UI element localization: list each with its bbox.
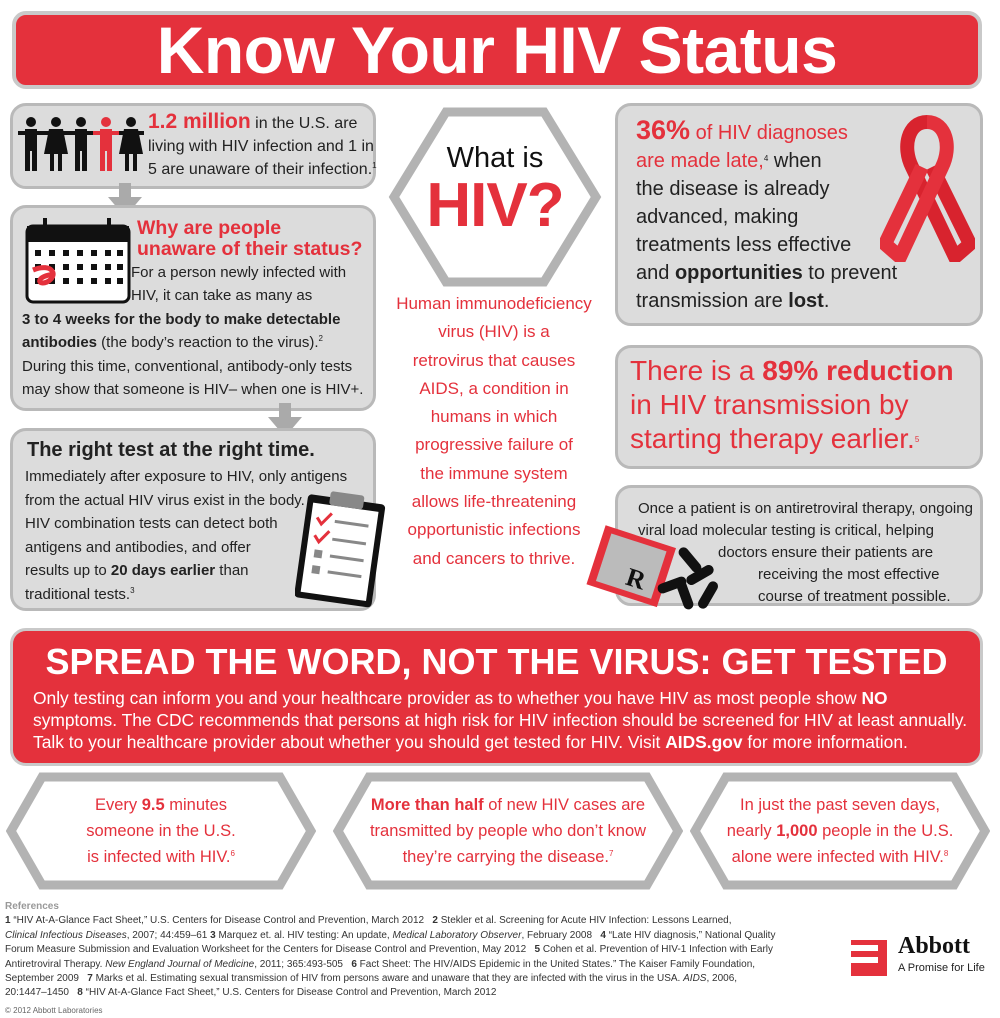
text: right test body: from the actual HIV virus exist in the body. (25, 492, 305, 508)
panel: right test (10, 428, 376, 611)
title banner: Know Your HIV Status (157, 13, 837, 87)
hexagon: more than half: More than half of new HIV cases are (371, 796, 645, 814)
logo: Abbott: A Promise for Life (898, 962, 985, 974)
text: antibodies (22, 311, 363, 398)
text: 1.2 million: 5 are unaware of their infection.1 (148, 161, 377, 178)
text: right test body: Immediately after exposure to HIV, only antigens (25, 468, 347, 485)
hexagon: what is HIV (388, 108, 602, 286)
text: 89%: starting therapy earlier.5 (630, 423, 919, 454)
text: antibodies: 3 to 4 weeks for the body to make detectable (22, 311, 340, 328)
title banner (12, 11, 982, 89)
references: Forum Measure Submission and Evaluation Worksheet for the Centers for Disease Control and Prevention, May 2012 5 Cohen et al. Prevention of HIV-1 Infection with Early (5, 944, 773, 955)
text: 89% (630, 355, 954, 454)
text: HIV definition: retrovirus that causes (413, 351, 575, 370)
text: viral load: receiving the most effective (758, 566, 939, 583)
text: 1.2 million: living with HIV infection and 1 in (148, 138, 374, 155)
logo: Abbott (851, 933, 985, 976)
panel: 89% reduction (615, 345, 983, 469)
icon: pill bottle and pills (586, 525, 718, 610)
references: 20:1447–1450 8 “HIV At-A-Glance Fact Sheet,” U.S. Centers for Disease Control and Prevention, March 2012 (5, 987, 496, 998)
text: 36%: transmission are lost. (636, 290, 829, 312)
text: viral load: doctors ensure their patients are (718, 544, 933, 561)
text: viral load: Once a patient is on antiretroviral therapy, ongoing (638, 500, 973, 517)
text: viral load (638, 500, 973, 605)
text: HIV definition: and cancers to thrive. (413, 549, 575, 568)
text: HIV definition: Human immunodeficiency (396, 294, 592, 313)
panel: 1.2 million (10, 103, 376, 189)
heading: why unaware: unaware of their status? (137, 238, 362, 260)
hexagon: past seven days: alone were infected with HIV.8 (732, 848, 948, 866)
text: HIV definition: AIDS, a condition in (419, 379, 569, 398)
hexagon: every 9.5 minutes: someone in the U.S. (86, 822, 236, 840)
text: spread body: Talk to your healthcare provider about whether you should get tested for HIV. Visit AIDS.gov for more information. (33, 732, 908, 752)
text: HIV definition: opportunistic infections (408, 520, 580, 539)
text: 89%: in HIV transmission by (630, 389, 909, 420)
hexagon: past seven days: In just the past seven days, (740, 796, 940, 814)
text: why unaware body: For a person newly infected with (131, 264, 346, 281)
text: right test body: HIV combination tests can detect both (25, 515, 278, 532)
icon: red ribbon (880, 115, 975, 262)
references: September 2009 7 Marks et al. Estimating sexual transmission of HIV from persons aware and unaware that they are infected with the virus in the USA. AIDS, 2006, (5, 973, 737, 984)
text: 89%: There is a 89% reduction (630, 355, 954, 386)
text: 36%: and opportunities to prevent (636, 262, 897, 284)
text: HIV definition: allows life-threatening (412, 492, 576, 511)
hexagon: past seven days: nearly 1,000 people in the U.S. (727, 822, 953, 840)
text: right test body: traditional tests.3 (25, 586, 135, 602)
text: antibodies: antibodies (the body’s reaction to the virus).2 (22, 334, 323, 351)
hexagon: more than half: transmitted by people who don’t know (370, 822, 646, 840)
hexagon: more than half: they’re carrying the disease.7 (403, 848, 613, 866)
heading: why unaware: Why are people (137, 217, 281, 239)
heading: right test: The right test at the right time. (27, 439, 315, 461)
arrow 2 (268, 403, 302, 428)
text: antibodies: may show that someone is HIV– when one is HIV+. (22, 381, 363, 398)
text: why unaware body: HIV, it can take as many as (131, 287, 312, 304)
hexagon: past seven days (690, 772, 990, 890)
text: right test body: results up to 20 days earlier than (25, 562, 249, 579)
text: right test body (25, 468, 347, 602)
text: spread body: Only testing can inform you and your healthcare provider as to whether you have HIV as most people show NO (33, 688, 888, 708)
references: Clinical Infectious Diseases, 2007; 44:459–61 3 Marquez et. al. HIV testing: An update, Medical Laboratory Observer, February 2008 4 “Late HIV diagnosis,” National Quality (5, 930, 775, 941)
arrow 1 (108, 183, 142, 205)
text: spread body (33, 688, 967, 752)
text: 36%: 36% of HIV diagnoses (636, 115, 848, 145)
text: 36% (636, 115, 898, 312)
hexagon: every 9.5 minutes (6, 772, 316, 890)
text: spread body: symptoms. The CDC recommends that persons at high risk for HIV infection should be screened for HIV at least annually. (33, 710, 967, 730)
text: right test body: antigens and antibodies, and offer (25, 538, 251, 556)
logo: Abbott: Abbott (898, 933, 970, 959)
icon: clipboard (295, 491, 386, 608)
text: 36%: treatments less effective (636, 234, 851, 256)
hexagon: every 9.5 minutes: Every 9.5 minutes (95, 796, 227, 814)
text: 36%: are made late,4 when (636, 150, 822, 172)
icon: people (18, 117, 144, 171)
heading: spread the word: SPREAD THE WORD, NOT THE VIRUS: GET TESTED (45, 641, 948, 682)
banner: spread the word (10, 628, 983, 766)
panel: antiretroviral (615, 485, 983, 606)
heading: why unaware (137, 217, 362, 260)
icon: calendar (26, 218, 130, 304)
references: © 2012 Abbott Laboratories (5, 1006, 103, 1015)
text: HIV definition: progressive failure of (415, 435, 573, 454)
hexagon: more than half (333, 772, 683, 890)
text: 36%: the disease is already (636, 178, 829, 200)
panel: 36% late (615, 103, 983, 326)
text: HIV definition (396, 294, 592, 568)
text: HIV definition: the immune system (420, 464, 568, 483)
text: why unaware body (131, 264, 346, 304)
text: what is: What is (447, 142, 543, 174)
references: 1 “HIV At-A-Glance Fact Sheet,” U.S. Centers for Disease Control and Prevention, March 2012 2 Stekler et al. Screening for Acute HIV Infection: Lessons Learned, (5, 915, 732, 926)
references: Antiretroviral Therapy. New England Journal of Medicine, 2011; 365:493-505 6 Fact Sheet: The HIV/AIDS Epidemic in the United States.” The Kaiser Family Foundation, (5, 959, 755, 970)
text: HIV definition: humans in which (431, 407, 557, 426)
hexagon: every 9.5 minutes: is infected with HIV.6 (87, 848, 235, 866)
references: References (5, 901, 59, 912)
text: antibodies: During this time, conventional, antibody-only tests (22, 358, 352, 375)
text: 1.2 million: 1.2 million in the U.S. are (148, 110, 357, 133)
text: HIV?: HIV? (426, 171, 564, 240)
text: viral load: viral load molecular testing is critical, helping (638, 522, 934, 539)
text: 36%: advanced, making (636, 206, 798, 228)
panel: why unaware (10, 205, 376, 411)
text: HIV definition: virus (HIV) is a (438, 322, 550, 341)
references (5, 901, 776, 1015)
text: 1.2 million (148, 110, 377, 178)
text: viral load: course of treatment possible. (758, 588, 951, 605)
icon: pill bottle and pills: R (623, 562, 650, 596)
